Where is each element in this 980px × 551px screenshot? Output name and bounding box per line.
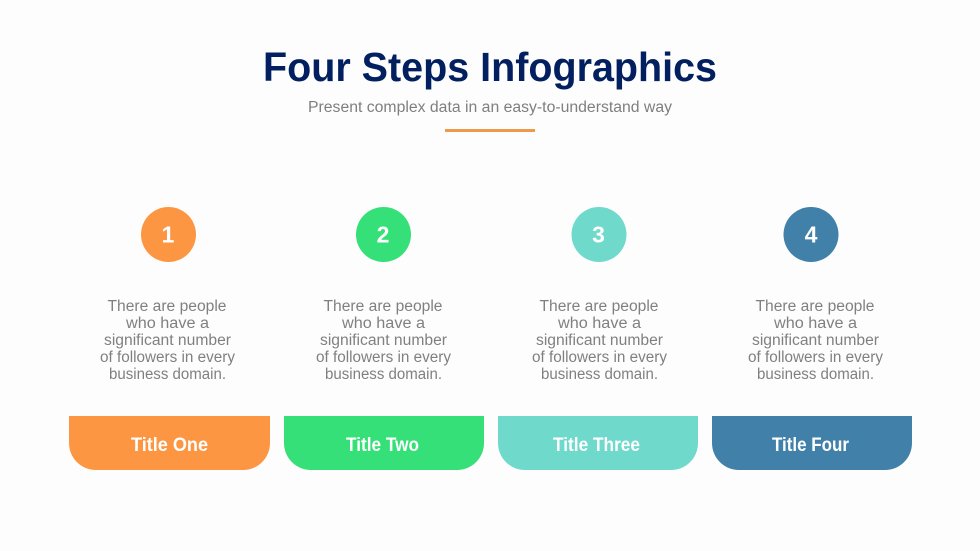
number badge 4: 4 bbox=[805, 222, 818, 248]
number badge 4 bbox=[784, 207, 838, 262]
step 2 description: of followers in every bbox=[316, 349, 451, 366]
step 2 description: There are people bbox=[324, 298, 442, 315]
title bar: Title Four: Title Four bbox=[772, 435, 850, 456]
step 1 description bbox=[100, 298, 235, 383]
step 1 description: business domain. bbox=[109, 366, 226, 383]
step 1 description: who have a bbox=[125, 315, 209, 332]
title: Four Steps Infographics bbox=[263, 44, 717, 90]
step 3 description: business domain. bbox=[541, 366, 658, 383]
step 2 bbox=[284, 207, 484, 470]
step 1 description: significant number bbox=[104, 332, 231, 349]
title bar: Title One: Title One bbox=[131, 435, 208, 456]
number badge 1: 1 bbox=[162, 222, 175, 248]
title bar: Title Four bbox=[712, 416, 912, 470]
step 2 description: business domain. bbox=[325, 366, 442, 383]
subtitle: Present complex data in an easy-to-understand way bbox=[308, 99, 672, 116]
step 3 bbox=[498, 207, 698, 470]
title bar: Title Two bbox=[284, 416, 484, 470]
step 3 description: There are people bbox=[540, 298, 658, 315]
step 2 description: significant number bbox=[320, 332, 447, 349]
step 4 description: who have a bbox=[773, 315, 857, 332]
step 4 description bbox=[748, 298, 883, 383]
step 2 description bbox=[316, 298, 451, 383]
step 1 description: There are people bbox=[108, 298, 226, 315]
step 4 description: of followers in every bbox=[748, 349, 883, 366]
number badge 2 bbox=[356, 207, 411, 262]
number badge 1 bbox=[141, 207, 196, 262]
title bar: Title One bbox=[69, 416, 270, 470]
step 1 bbox=[69, 207, 270, 470]
step 3 description: significant number bbox=[536, 332, 663, 349]
number badge 3: 3 bbox=[592, 222, 605, 248]
title bar: Title Three: Title Three bbox=[553, 435, 640, 456]
number badge 2: 2 bbox=[377, 222, 389, 248]
step 4 description: business domain. bbox=[757, 366, 874, 383]
step 1 description: of followers in every bbox=[100, 349, 235, 366]
step 4 description: There are people bbox=[756, 298, 874, 315]
step 3 description: who have a bbox=[557, 315, 641, 332]
title bar: Title Two: Title Two bbox=[346, 435, 419, 456]
step 3 description bbox=[532, 298, 667, 383]
step 4 description: significant number bbox=[752, 332, 879, 349]
number badge 3 bbox=[572, 207, 626, 262]
step 4 bbox=[712, 207, 912, 470]
step 3 description: of followers in every bbox=[532, 349, 667, 366]
step 2 description: who have a bbox=[341, 315, 425, 332]
title underline accent bbox=[445, 129, 535, 132]
title bar: Title Three bbox=[498, 416, 698, 470]
